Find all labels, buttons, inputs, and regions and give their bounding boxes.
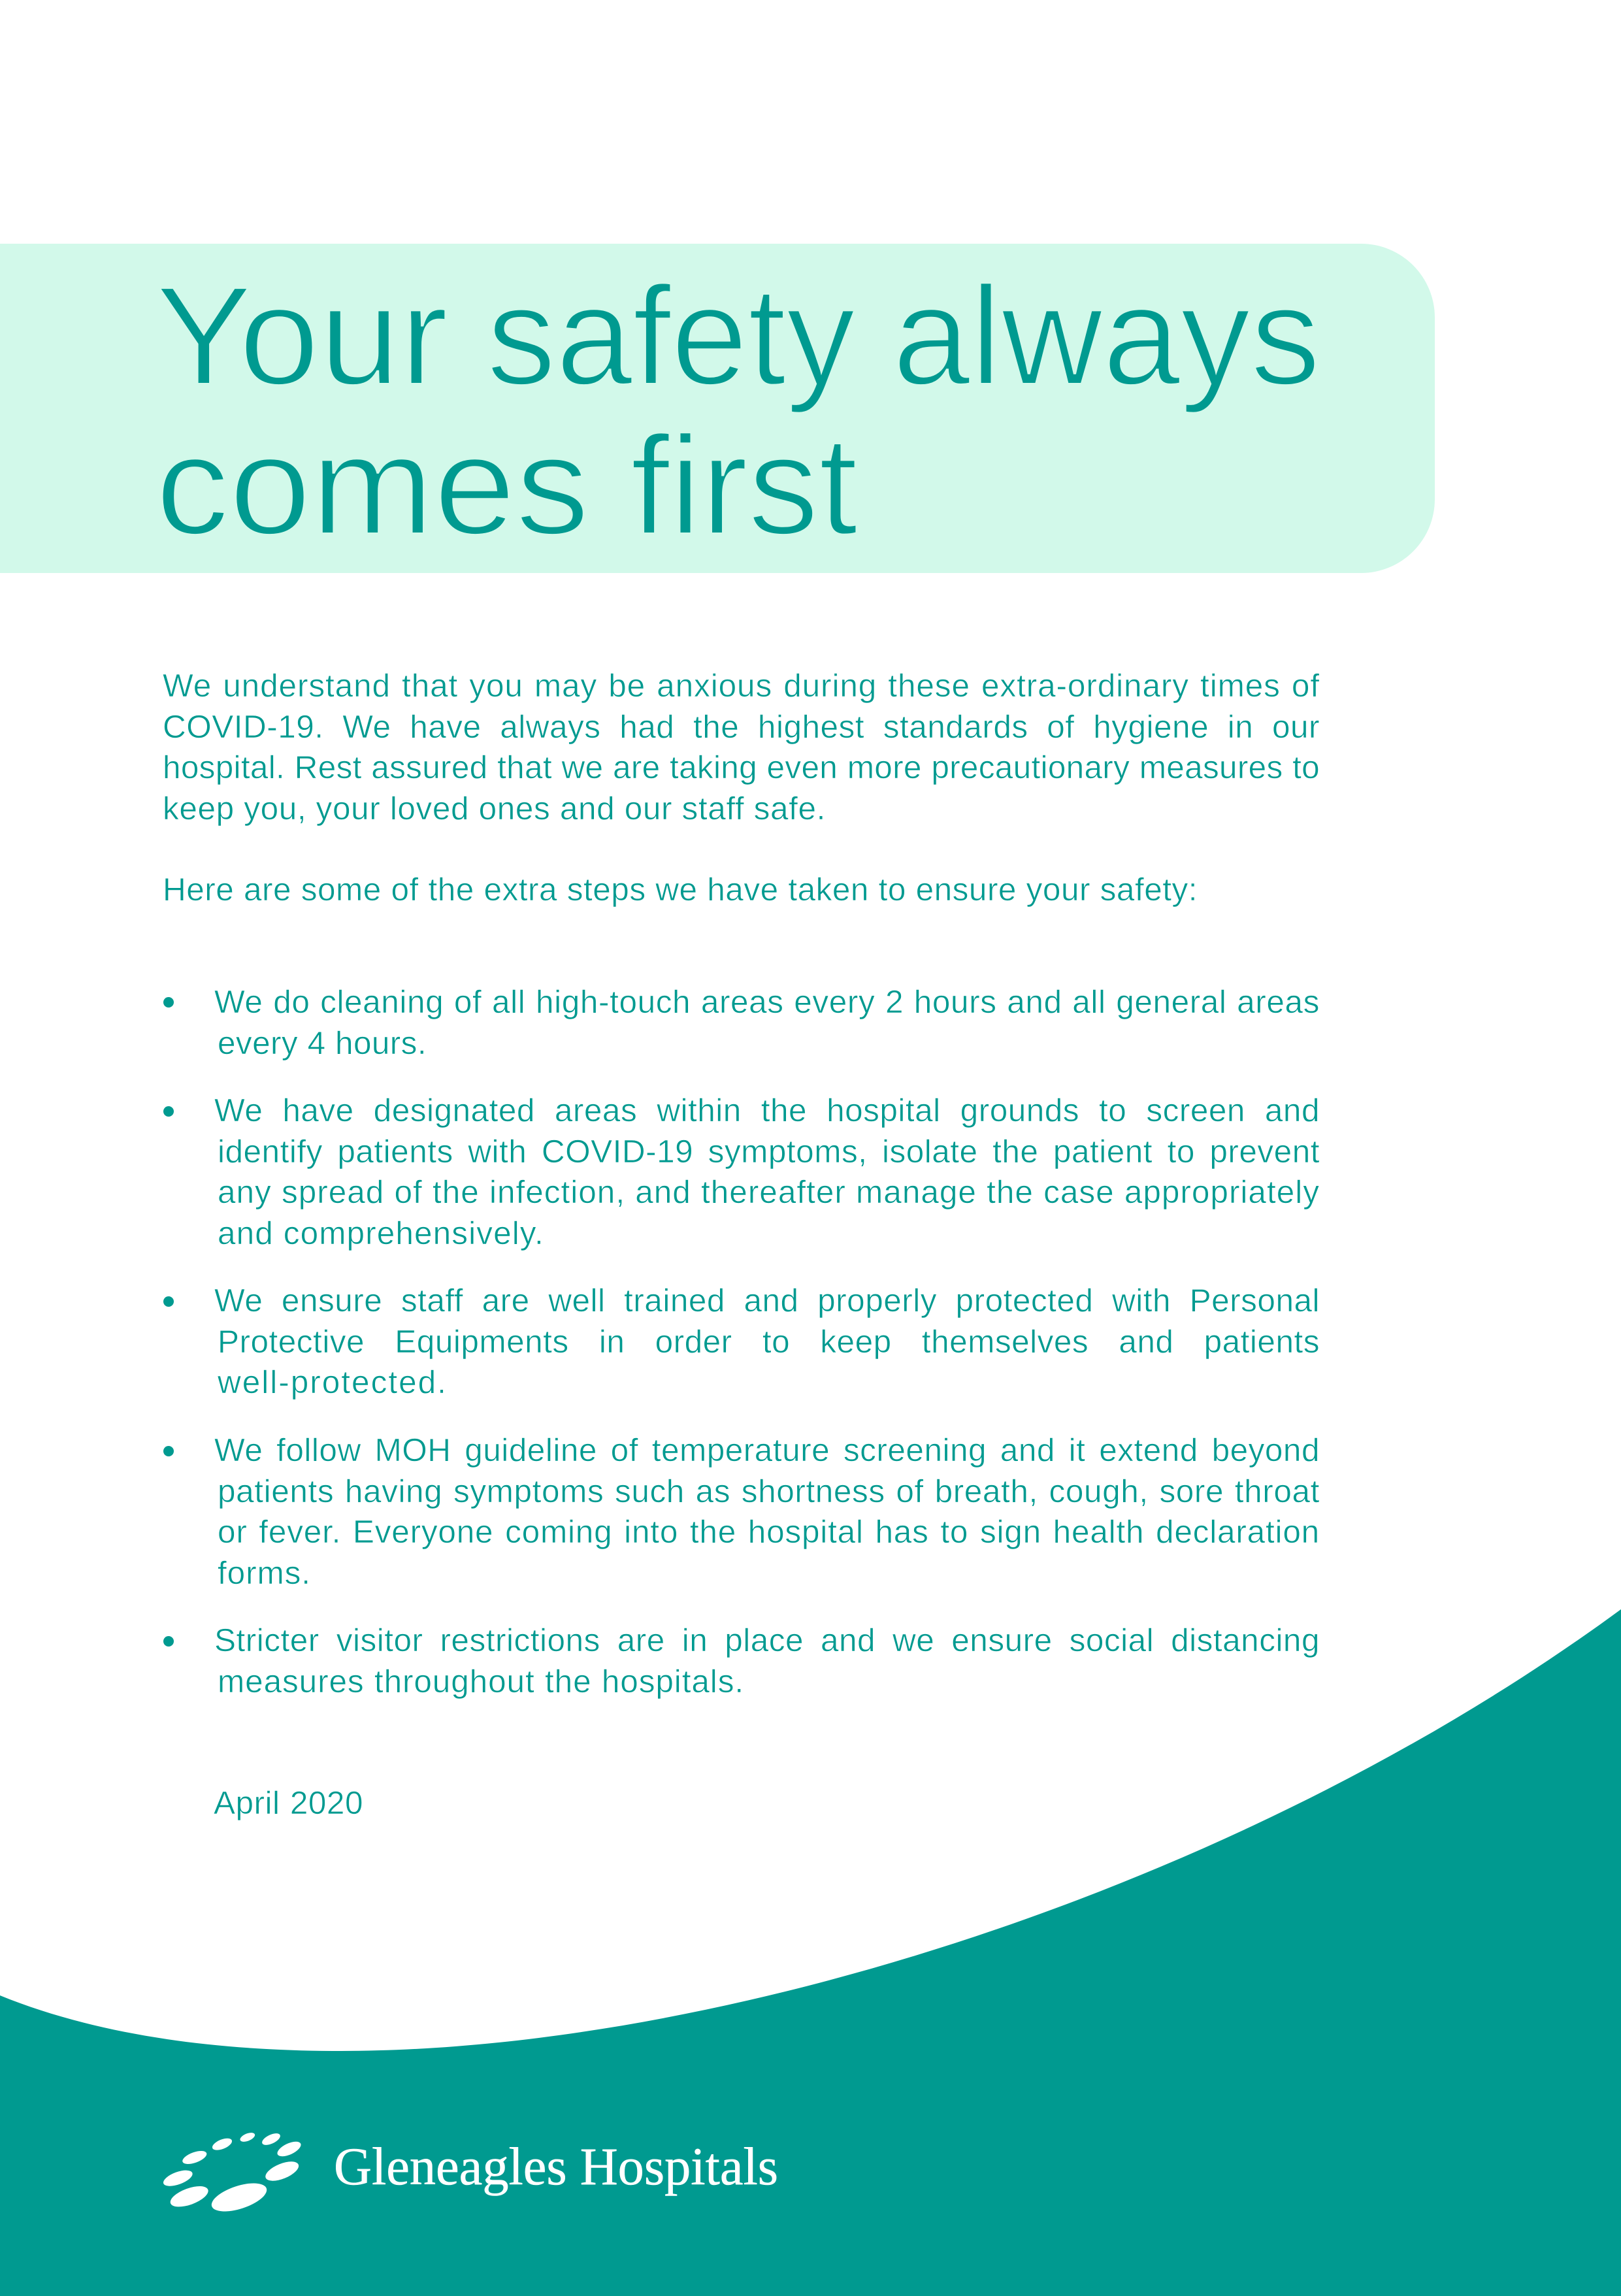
bullet text: Stricter visitor restrictions are in place and we ensure social distancing: [214, 1622, 1320, 1658]
bullet text: We do cleaning of all high-touch areas every 2 hours and all general areas: [214, 984, 1320, 1020]
bullet text: We follow MOH guideline of temperature screening and it extend beyond: [214, 1432, 1320, 1468]
bullet dot: [163, 1636, 174, 1647]
logo wordmark: Gleneagles Hospitals: [334, 2137, 778, 2196]
title: safety: [487, 257, 855, 414]
intro paragraph: keep you, your loved ones and our staff safe.: [163, 791, 826, 827]
title: first: [630, 406, 858, 564]
title: [156, 257, 1320, 564]
bullet 2: designated areas: [163, 1092, 1320, 1251]
bullet text: We have designated areas within the hospital grounds to screen and: [214, 1092, 1320, 1128]
intro paragraph: COVID-19. We have always had the highest standards of hygiene in our: [163, 709, 1320, 745]
bullet text: or fever. Everyone coming into the hospital has to sign health declaration: [218, 1514, 1320, 1550]
bullet 5: visitor restrictions: [163, 1622, 1320, 1699]
bullet text: forms.: [218, 1555, 311, 1591]
date: April 2020: [214, 1785, 363, 1821]
title: comes: [156, 406, 589, 564]
bullet text: any spread of the infection, and thereafter manage the case appropriately: [218, 1174, 1320, 1210]
bullet text: every 4 hours.: [218, 1025, 427, 1061]
bullet 4: temperature screening: [163, 1432, 1320, 1591]
bullet text: patients having symptoms such as shortness of breath, cough, sore throat: [218, 1473, 1320, 1509]
bullet text: well-protected.: [218, 1364, 448, 1400]
icon: logo ellipses: [161, 2131, 303, 2217]
bullet text: [214, 1283, 1320, 1400]
bullet text: Protective Equipments in order to keep themselves and patients: [218, 1324, 1320, 1360]
lead-in sentence: Here are some of the extra steps we have taken to ensure your safety:: [163, 872, 1198, 908]
intro paragraph: hospital. Rest assured that we are taking even more precautionary measures to: [163, 749, 1320, 785]
bullet text: identify patients with COVID-19 symptoms, isolate the patient to prevent: [218, 1134, 1320, 1170]
bullet text: [214, 984, 1320, 1061]
title banner: [0, 244, 1435, 573]
bullet 3: staff protection: [163, 1283, 1320, 1400]
bullet text: and comprehensively.: [218, 1215, 544, 1251]
bullet text: measures throughout the hospitals.: [218, 1664, 744, 1699]
bullet dot: [163, 997, 174, 1008]
bullet text: [214, 1432, 1320, 1591]
bullet text: [214, 1092, 1320, 1251]
bullet text: [214, 1622, 1320, 1699]
bullet dot: [163, 1446, 174, 1456]
intro paragraph: We understand that you may be anxious during these extra-ordinary times of: [163, 668, 1320, 704]
intro paragraph: [163, 668, 1320, 827]
title: always: [892, 257, 1320, 414]
bullet 1: cleaning: [163, 984, 1320, 1061]
bullet text: We ensure staff are well trained and properly protected with Personal: [214, 1283, 1320, 1319]
title: Your: [156, 257, 448, 414]
bullet dot: [163, 1296, 174, 1307]
bullet dot: [163, 1106, 174, 1117]
